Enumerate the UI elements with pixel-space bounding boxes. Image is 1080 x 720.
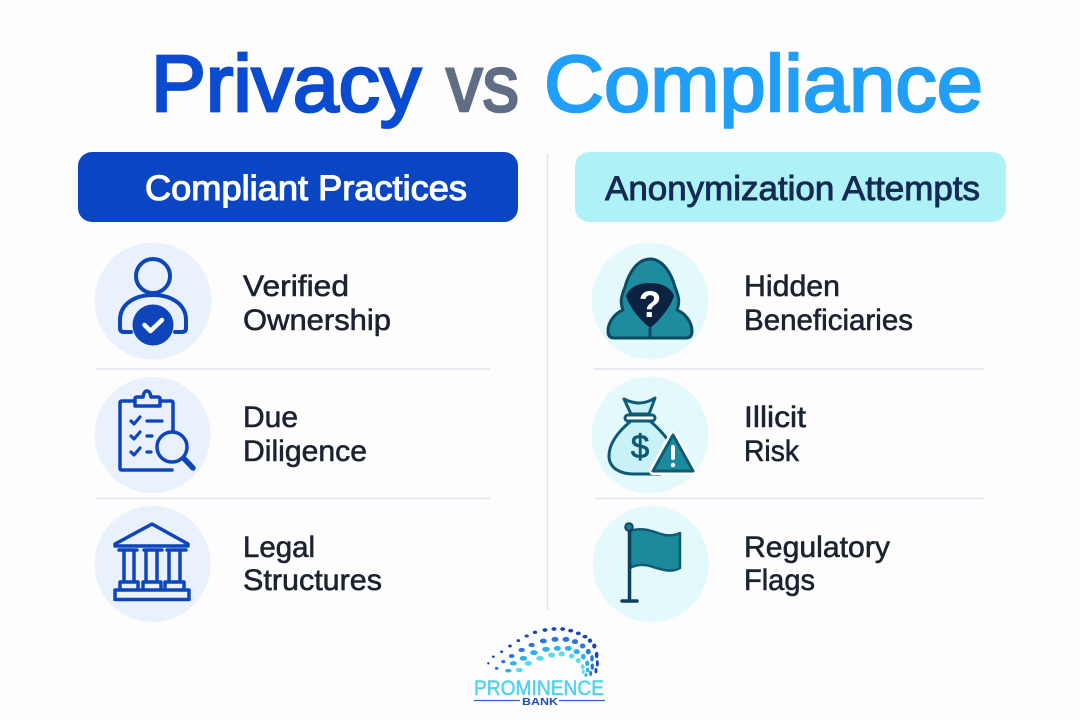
heading: anonymization attempts: Anonymization Attempts (605, 170, 980, 208)
item: verified ownership (94, 242, 391, 360)
item: regulatory flags (593, 506, 890, 622)
label: Ownership (243, 304, 391, 337)
heading: compliant practices (78, 152, 518, 222)
title: Privacy (151, 39, 421, 128)
icon: verified person (94, 242, 212, 360)
logo: prominence bank (474, 628, 605, 708)
label: Legal (243, 531, 315, 564)
label: Structures (243, 564, 382, 597)
logo dots (488, 628, 598, 676)
panel: anonymization attempts (575, 152, 1006, 622)
heading: anonymization attempts (575, 152, 1006, 222)
icon: flag (593, 506, 709, 622)
label: Diligence (243, 435, 367, 468)
title: Compliance (544, 39, 983, 128)
label: Illicit (744, 401, 807, 434)
icon: money bag with warning (592, 376, 708, 494)
label: Flags (744, 564, 815, 597)
item: legal structures (94, 506, 382, 622)
label: Beneficiaries (744, 304, 913, 337)
label: Risk (744, 435, 800, 468)
label: Due (243, 401, 298, 434)
title (151, 39, 983, 128)
item: illicit risk (592, 376, 807, 494)
icon: bank building (94, 506, 210, 622)
item: hidden beneficiaries (592, 242, 913, 360)
heading: compliant practices: Compliant Practices (145, 169, 467, 208)
label: Hidden (744, 270, 840, 303)
item: due diligence (94, 377, 367, 493)
icon: clipboard with magnifier (94, 377, 210, 493)
center divider (546, 154, 548, 610)
icon: money bag with warning: $ (631, 428, 649, 465)
logo wordmark: PROMINENCE (474, 677, 604, 700)
icon: hooded figure (592, 242, 708, 360)
title: vs (446, 39, 519, 128)
panel: compliant practices (78, 152, 518, 622)
label: Verified (243, 270, 349, 303)
icon: hooded figure: ? (639, 284, 661, 325)
logo: prominence bank: BANK (522, 696, 558, 708)
label: Regulatory (744, 531, 890, 564)
